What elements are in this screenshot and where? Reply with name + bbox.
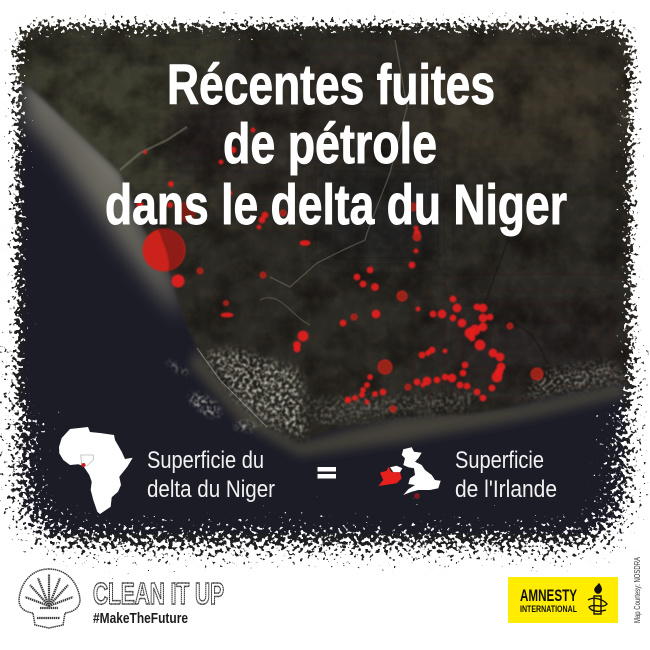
offshore clouds [166,359,258,434]
equals sign [318,467,336,478]
text: superficie de l'Irlande: Superficie [455,447,544,474]
title: Récentes fuites [167,53,495,117]
land mass [0,0,650,450]
east coast speckle [300,355,630,425]
icon: british isles map [378,447,441,499]
amnesty international logo: INTERNATIONAL [520,604,577,615]
title [105,53,567,237]
oil spill markers [137,128,543,412]
title: de pétrole [223,112,437,176]
delta forest speckle [202,345,311,441]
text: superficie du delta du Niger: Superficie du [147,447,264,474]
icon: oil company shell logo [19,569,80,628]
text: hashtag: #MakeTheFuture [93,611,188,627]
map credit: Map Courtesy: NOSDRA [633,557,642,623]
amnesty international logo: AMNESTY [520,587,577,605]
icon: candle in barbed wire [588,584,607,614]
text: clean it up slogan: CLEAN IT UP [93,576,224,611]
text: superficie de l'Irlande [455,447,557,503]
amnesty international logo [508,577,618,623]
text: superficie du delta du Niger [147,447,275,503]
text: superficie du delta du Niger: delta du Niger [147,476,275,503]
text: superficie de l'Irlande: de l'Irlande [455,476,557,503]
large lagos circle [142,202,196,288]
shoreline [197,348,267,427]
icon: africa map [59,427,133,514]
eastern river [484,235,548,365]
coastal sediment band [25,82,625,456]
niger river [120,40,407,325]
